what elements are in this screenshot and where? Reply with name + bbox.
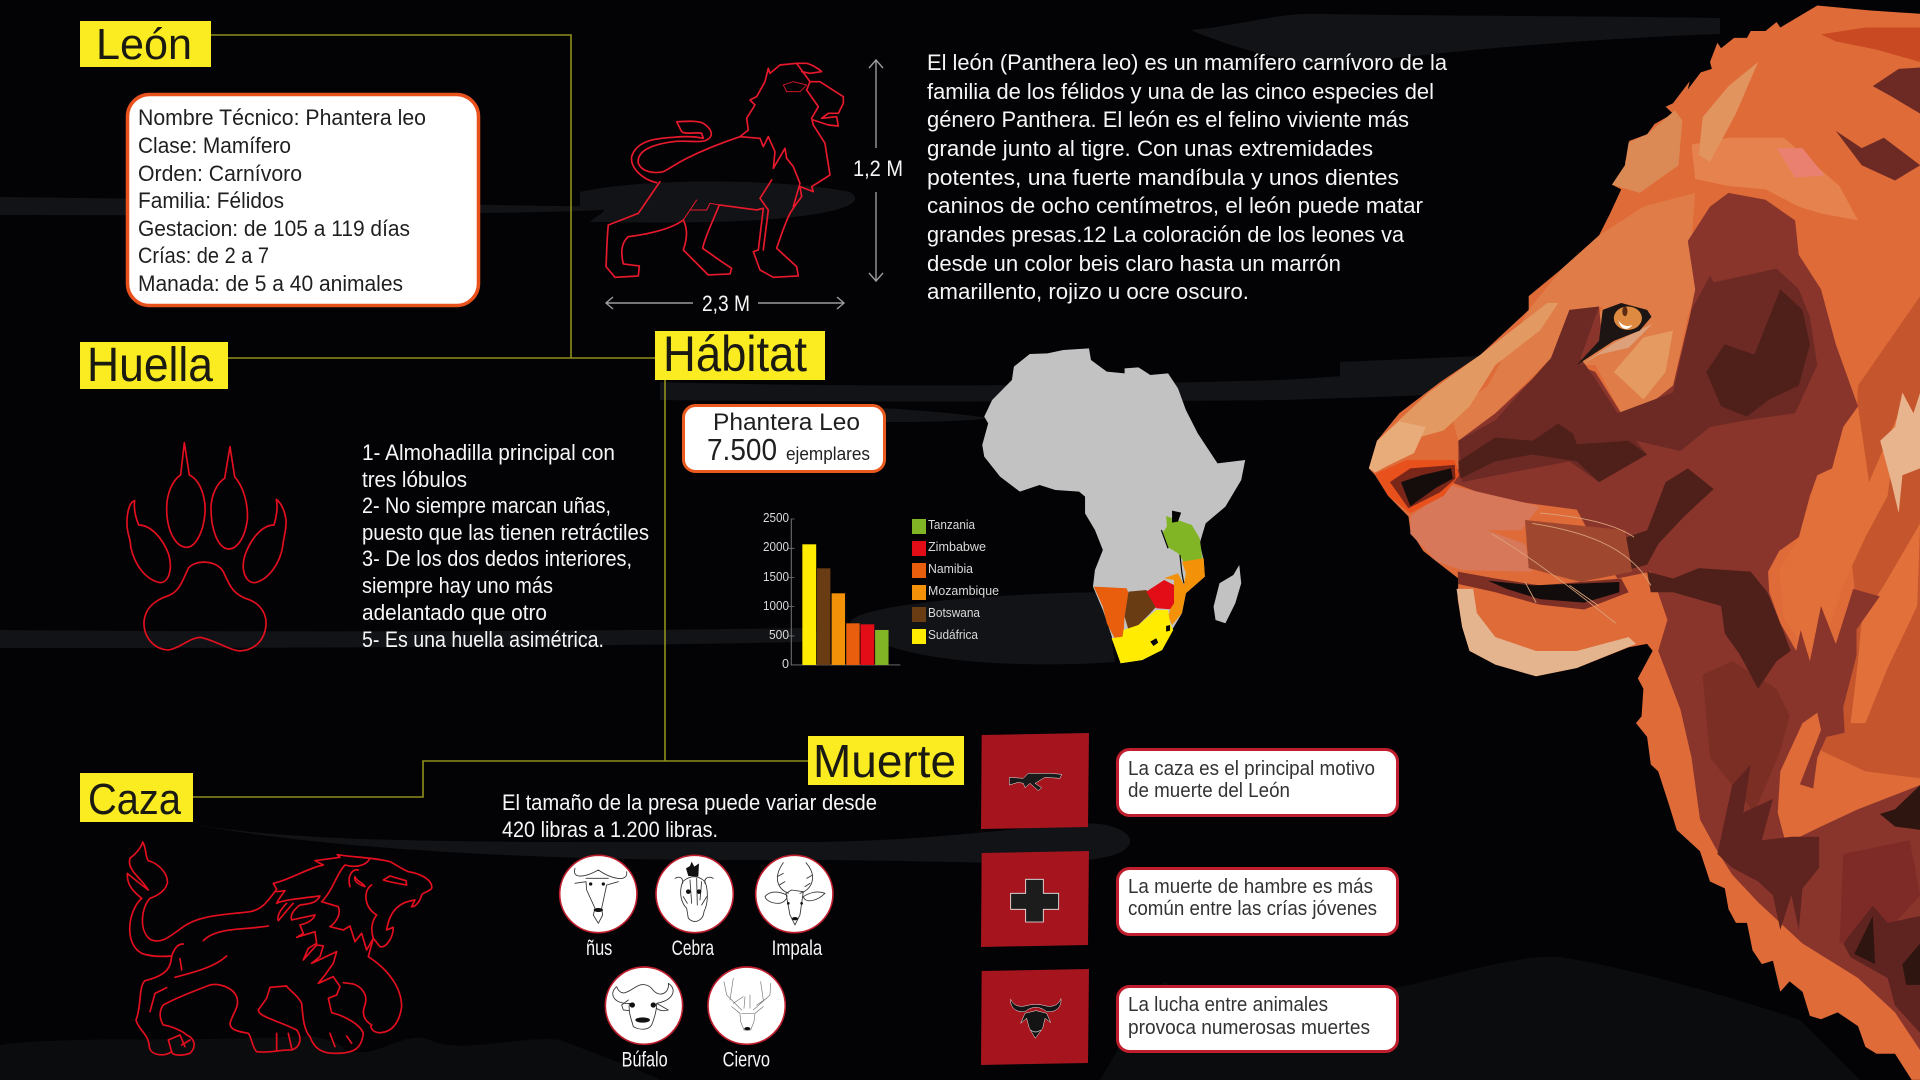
legend: Namibia [928, 561, 974, 576]
icon: impala: Impala [772, 937, 823, 960]
icon: lion outline with size: 1,2 M [853, 156, 903, 181]
heading: León: León [96, 20, 192, 69]
text block: descripción: El león (Panthera leo) es un mamífero carnívoro de la [927, 50, 1448, 75]
bar chart: 0 [782, 656, 789, 671]
icon: ciervo [708, 967, 785, 1072]
text block: huella: 5- Es una huella asimétrica. [362, 627, 604, 652]
panel: ficha técnica: Manada: de 5 a 40 animales [138, 271, 403, 296]
legend: Tanzania [928, 517, 976, 532]
panel: ficha técnica: Gestacion: de 105 a 119 días [138, 216, 410, 241]
legend: Zimbabwe [928, 539, 986, 554]
text block: tamaño de la presa: 420 libras a 1.200 libras. [502, 817, 718, 842]
heading: Caza: Caza [88, 775, 181, 824]
panel: ficha técnica: Nombre Técnico: Phantera leo [138, 105, 426, 130]
icon: ciervo: Ciervo [723, 1049, 770, 1072]
icon: toro [981, 969, 1089, 1065]
callout: población [684, 406, 884, 472]
callout: hambre: común entre las crías jóvenes [1128, 898, 1377, 920]
text block: tamaño de la presa [502, 790, 877, 842]
legend: Botswana [928, 605, 981, 620]
icon: lion outline with size [606, 60, 903, 316]
text block: descripción: grandes presas.12 La coloración de los leones va [927, 222, 1405, 247]
legend [912, 517, 999, 644]
icon: ñus [560, 855, 637, 960]
callout: caza: de muerte del León [1128, 780, 1290, 802]
legend: Mozambique [928, 583, 999, 598]
text block: huella: puesto que las tienen retráctiles [362, 520, 649, 545]
callout: hambre [1118, 868, 1398, 934]
callout: caza [1118, 750, 1398, 816]
legend: Sudáfrica [928, 627, 979, 642]
bar chart [763, 510, 900, 671]
icon: búfalo: Búfalo [622, 1049, 668, 1072]
text block: huella: 3- De los dos dedos interiores, [362, 546, 632, 571]
text block: huella: siempre hay uno más [362, 573, 553, 598]
panel: ficha técnica: Crías: de 2 a 7 [138, 243, 269, 268]
icon: cebra: Cebra [672, 937, 714, 960]
callout: población: 7.500 [707, 432, 777, 467]
panel: ficha técnica: Clase: Mamífero [138, 133, 291, 158]
callout: población: ejemplares [786, 444, 870, 464]
bar chart: 2500 [763, 510, 789, 525]
icon: roaring lion outline [127, 842, 432, 1055]
connector lines [193, 35, 808, 797]
icon: búfalo [605, 967, 683, 1072]
text block: huella: 2- No siempre marcan uñas, [362, 493, 611, 518]
text block: descripción: desde un color beis claro hasta un marrón [927, 251, 1341, 276]
callout: caza: La caza es el principal motivo [1128, 758, 1375, 780]
heading: Hábitat: Hábitat [663, 326, 807, 382]
text block: descripción: caninos de ocho centímetros, el león puede matar [927, 193, 1423, 218]
text block: descripción: amarillento, rojizo u ocre oscuro. [927, 279, 1249, 304]
text block: huella: adelantado que otro [362, 600, 547, 625]
text block: descripción [927, 50, 1448, 304]
panel: ficha técnica: Familia: Félidos [138, 188, 284, 213]
text block: huella: 1- Almohadilla principal con [362, 440, 615, 465]
icon: rifle [981, 733, 1089, 829]
text block: descripción: familia de los félidos y una de las cinco especies del [927, 79, 1434, 104]
callout: hambre: La muerte de hambre es más [1128, 876, 1373, 898]
text block: huella: tres lóbulos [362, 467, 467, 492]
icon: cruz [981, 851, 1089, 947]
callout: lucha: provoca numerosas muertes [1128, 1017, 1370, 1039]
map: África [982, 348, 1245, 663]
bar chart: 2000 [763, 539, 789, 554]
illustration: lion head profile [1369, 6, 1920, 1080]
icon: ñus: ñus [586, 937, 612, 960]
icon: impala [756, 855, 833, 960]
text block: descripción: grande junto al tigre. Con unas extremidades [927, 136, 1373, 161]
bar chart: 1000 [763, 598, 789, 613]
text block: descripción: género Panthera. El león es el felino viviente más [927, 107, 1409, 132]
icon: cebra [656, 855, 733, 960]
bar chart: 1500 [763, 569, 789, 584]
panel: ficha técnica: Orden: Carnívoro [138, 161, 302, 186]
heading: Muerte: Muerte [813, 735, 956, 787]
text block: huella [362, 440, 649, 652]
text block: descripción: potentes, una fuerte mandíbula y unos dientes [927, 165, 1399, 190]
panel: ficha técnica [128, 94, 478, 306]
icon: lion outline with size: 2,3 M [702, 291, 750, 316]
icon: paw print [127, 443, 286, 651]
bar chart: 500 [769, 627, 789, 642]
callout: lucha: La lucha entre animales [1128, 994, 1328, 1016]
text block: tamaño de la presa: El tamaño de la presa puede variar desde [502, 790, 877, 815]
heading: Huella: Huella [87, 339, 213, 392]
callout: población: Phantera Leo [713, 409, 860, 436]
callout: lucha [1118, 986, 1398, 1052]
